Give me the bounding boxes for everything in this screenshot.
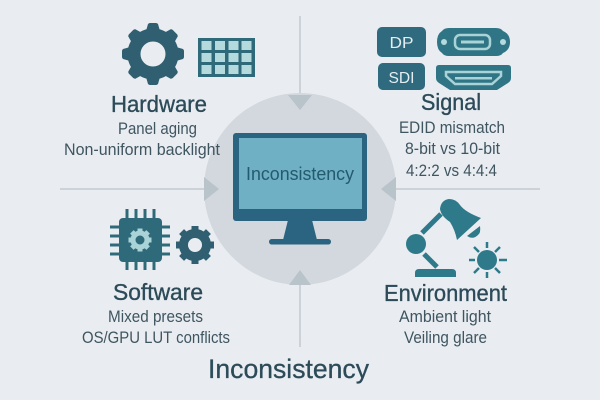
icon: sun bbox=[469, 242, 507, 278]
text: signal: Signal bbox=[421, 89, 481, 115]
icon: monitor bbox=[233, 133, 367, 244]
icon: panel grid bbox=[198, 38, 255, 77]
arrow: bottom bbox=[289, 270, 311, 285]
central circle bbox=[204, 93, 396, 285]
icon: hardware gear bbox=[122, 23, 184, 85]
icon: desk lamp bbox=[406, 199, 481, 277]
text: software: Software bbox=[113, 279, 203, 305]
text: signal: EDID mismatch bbox=[399, 119, 505, 137]
text: environment: Ambient light bbox=[399, 308, 491, 326]
icon: DisplayPort connector bbox=[437, 28, 510, 56]
arrow: top bbox=[288, 95, 312, 110]
text: software: OS/GPU LUT conflicts bbox=[82, 329, 230, 347]
arrow: right bbox=[381, 177, 396, 201]
text: environment: Environment bbox=[384, 280, 508, 306]
arrow: left bbox=[204, 177, 219, 201]
text: environment bbox=[384, 280, 508, 347]
icon: DP badge: DP bbox=[390, 35, 414, 52]
icon: chip bbox=[110, 209, 170, 270]
monitor label: Inconsistency bbox=[246, 163, 355, 184]
icon: SDI badge bbox=[378, 63, 425, 90]
text: software: Mixed presets bbox=[108, 308, 203, 326]
chip gear bbox=[128, 228, 152, 252]
icon: software gear bbox=[176, 226, 214, 264]
text: environment: Veiling glare bbox=[404, 329, 487, 347]
text: signal: 8-bit vs 10-bit bbox=[405, 140, 500, 158]
text: software bbox=[82, 279, 230, 347]
icon: DP badge bbox=[377, 27, 426, 57]
icon: HDMI connector bbox=[436, 65, 511, 90]
text: hardware: Hardware bbox=[111, 91, 207, 117]
text: hardware: Non-uniform backlight bbox=[64, 141, 220, 159]
icon: SDI badge: SDI bbox=[388, 70, 414, 87]
text: hardware: Panel aging bbox=[118, 120, 197, 138]
bottom title: Inconsistency bbox=[208, 354, 369, 384]
text: signal bbox=[399, 89, 505, 180]
text: signal: 4:2:2 vs 4:4:4 bbox=[406, 162, 497, 180]
text: hardware bbox=[64, 91, 220, 159]
